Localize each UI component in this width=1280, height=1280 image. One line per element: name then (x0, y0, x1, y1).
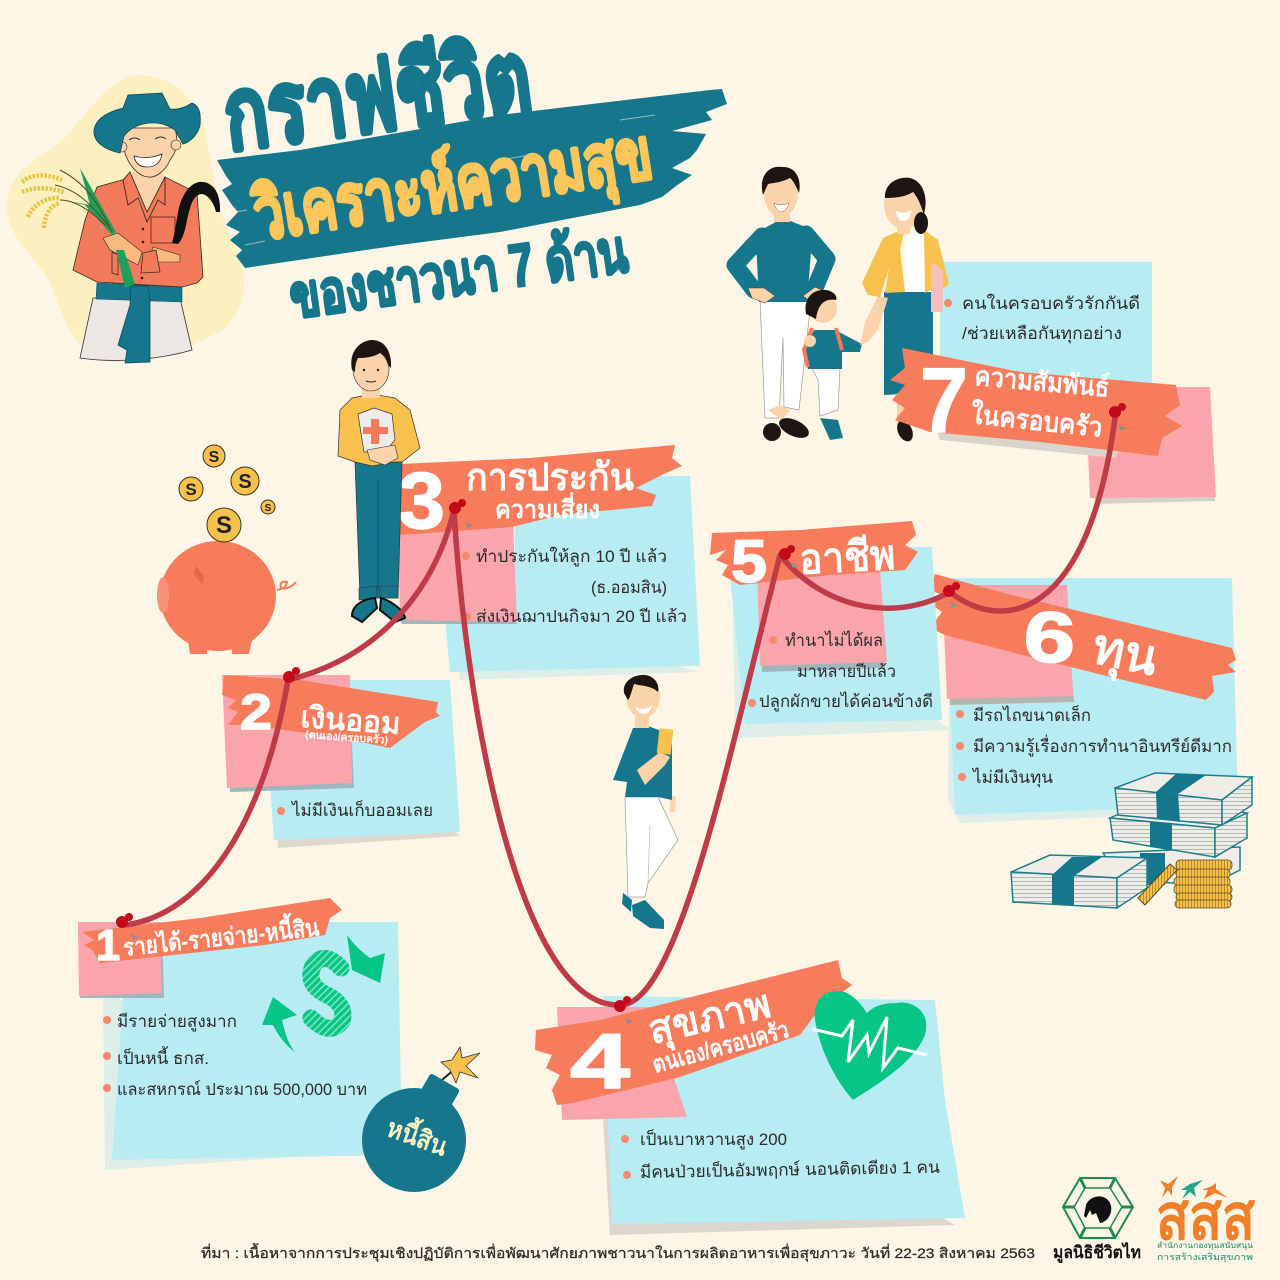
panel 5: occupation (710, 521, 950, 738)
heading 7 (890, 348, 1182, 456)
panel 7: family relations note (935, 262, 1216, 504)
body text 6: ไม่มีเงินทุน (971, 767, 1053, 788)
heading 1: รายได้-รายจ่าย-หนี้สิน (121, 909, 321, 962)
body text 5 (759, 630, 933, 712)
heading 2 (222, 675, 440, 748)
body text 6 (971, 704, 1232, 788)
body text 5: ทำนาไม่ได้ผล (785, 630, 883, 650)
body text 7: /ช่วยเหลือกันทุกอย่าง (962, 324, 1122, 344)
panel 2: savings (222, 675, 460, 848)
body text 1: เป็นหนี้ ธกส. (117, 1046, 209, 1068)
pin markers (116, 403, 1126, 1024)
panel 3: risk insurance (398, 445, 700, 680)
heading 4: สุขภาพ (644, 982, 776, 1056)
subtitle: ของชาวนา 7 ด้าน: ของชาวนา 7 ด้าน (285, 217, 632, 331)
illustration: man with insurance shirt (338, 340, 420, 622)
heading 3: 3 (398, 456, 445, 545)
illustration: piggy bank with coins: S (185, 480, 197, 499)
body text 7 (962, 293, 1140, 344)
heading 2: 2 (240, 684, 272, 740)
body text 3: ทำประกันให้ลูก 10 ปี แล้ว (476, 546, 667, 567)
illustration: family (735, 167, 949, 444)
woman (860, 178, 949, 444)
body text 7: คนในครอบครัวรักกันดี (962, 293, 1140, 313)
title: กราฟชีวิต: กราฟชีวิต (217, 21, 537, 172)
body text 4: เป็นเบาหวานสูง 200 (640, 1128, 787, 1150)
panel 6: capital (930, 574, 1240, 823)
heading 5: 5 (731, 528, 767, 595)
body text 3: (ธ.ออมสิน) (591, 578, 667, 597)
child (803, 290, 862, 440)
logo: สสส: การสร้างเสริมสุขภาพ (1157, 1252, 1253, 1263)
illustration: piggy bank with coins (157, 445, 296, 654)
heading 4: 4 (570, 1017, 630, 1105)
icon: bomb: หนี้สิน (383, 1108, 453, 1162)
heading 1: 1 (96, 921, 120, 970)
heading 7: ในครอบครัว (969, 398, 1104, 443)
heading 2: เงินออม (300, 701, 402, 741)
heading 3 (398, 445, 682, 545)
source footnote: ที่มา : เนื้อหาจากการประชุมเชิงปฏิบัติการเพื่อพัฒนาศักยภาพชาวนาในการผลิตอาหารเพื่อสุขภาวะ วันที่ 22-23 สิงหาคม 2563 (201, 1243, 1035, 1262)
heading 4 (535, 960, 852, 1105)
heading 6 (930, 574, 1236, 700)
illustration: piggy bank with coins: S (238, 471, 252, 493)
logo: มูลนิธิชีวิตไท (1053, 1178, 1141, 1264)
body text 6: มีรถไถขนาดเล็ก (973, 704, 1091, 725)
illustration: piggy bank with coins: S (265, 503, 272, 514)
logo: สสส: สสส (1156, 1181, 1255, 1253)
heading 5: อาชีพ (798, 531, 896, 583)
body text 3 (476, 546, 687, 626)
heading 3: ความเสี่ยง (495, 492, 600, 524)
body text 6: มีความรู้เรื่องการทำนาอินทรีย์ดีมาก (973, 734, 1232, 757)
title banner: วิเคราะห์ความสุข: วิเคราะห์ความสุข (247, 113, 658, 261)
heading 7: 7 (920, 350, 968, 452)
heading 4: ตนเอง/ครอบครัว (650, 1016, 792, 1079)
body text 4 (640, 1128, 940, 1182)
life graph curve (125, 410, 1116, 1005)
panel 1: income, expense, debt (78, 898, 480, 1192)
man (735, 167, 827, 442)
illustration: farmer with rice and sickle (7, 75, 244, 363)
body text 5: ปลูกผักขายได้ค่อนข้างดี (759, 691, 933, 712)
logo: มูลนิธิชีวิตไท: มูลนิธิชีวิตไท (1053, 1242, 1141, 1264)
body text 2: ไม่มีเงินเก็บออมเลย (290, 799, 433, 820)
heading 3: การประกัน (466, 457, 634, 499)
illustration: piggy bank with coins: S (209, 449, 220, 466)
body text 3: ส่งเงินฌาปนกิจมา 20 ปี แล้ว (476, 607, 687, 626)
heading 5 (710, 521, 918, 595)
illustration: money stacks and coins (1011, 773, 1252, 908)
panel 4: health (535, 960, 965, 1235)
icon: heart with pulse (812, 991, 927, 1100)
body text 4: มีคนป่วยเป็นอัมพฤกษ์ นอนติดเตียง 1 คน (640, 1156, 940, 1182)
icon: dollar with arrows (262, 935, 385, 1052)
body text 1: มีรายจ่ายสูงมาก (117, 1012, 237, 1032)
body text 5: มาหลายปีแล้ว (797, 662, 896, 681)
heading 6: ทุน (1087, 618, 1163, 689)
heading 7: ความสัมพันธ์ (973, 360, 1111, 403)
illustration: man with phone (613, 675, 678, 929)
heading 2: (ตนเอง/ครอบครัว) (305, 728, 389, 747)
illustration: piggy bank with coins: S (216, 512, 232, 539)
heading 1 (82, 898, 342, 970)
heading 6: 6 (1021, 596, 1078, 680)
body text 1: และสหกรณ์ ประมาณ 500,000 บาท (117, 1080, 367, 1099)
icon: bomb (362, 1047, 480, 1192)
body text 1 (117, 1012, 367, 1099)
logo: สสส: สำนักงานกองทุนสนับสนุน (1157, 1241, 1254, 1250)
